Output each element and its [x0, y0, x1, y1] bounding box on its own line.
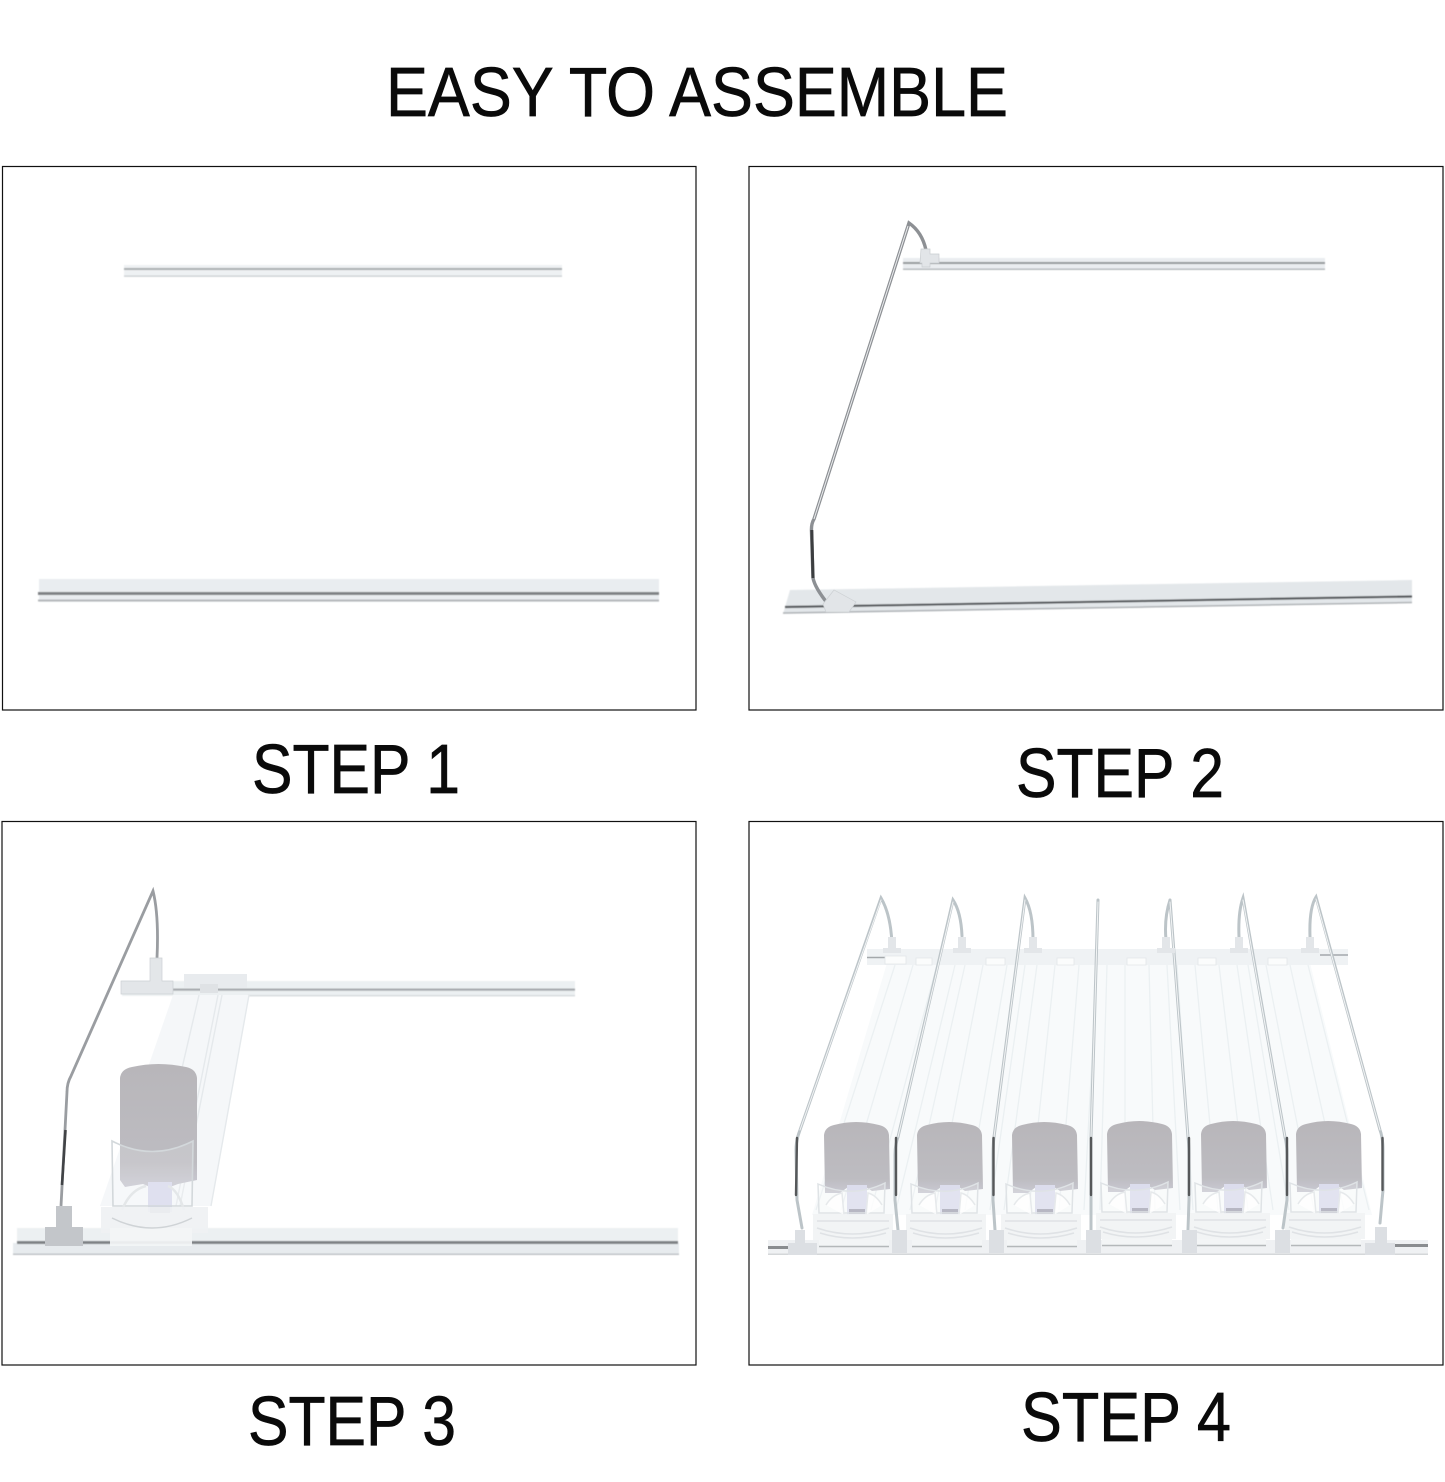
panel: step 3: [2, 822, 696, 1365]
rear clips: [883, 937, 1319, 953]
clear track: [100, 974, 249, 1206]
slider 1: [813, 1122, 893, 1247]
top rail: [124, 265, 562, 277]
top clip: [121, 958, 173, 994]
panel: step 1: [2, 166, 696, 710]
label: step 2: STEP 2: [1016, 734, 1224, 812]
rear rail: [867, 949, 1348, 965]
paddle slider: [101, 1064, 208, 1246]
sliders: [813, 1121, 1365, 1247]
label: step 3: STEP 3: [248, 1382, 456, 1460]
wire divider: [811, 223, 926, 604]
slider 4: [1096, 1121, 1176, 1246]
title: EASY TO ASSEMBLE: [386, 53, 1008, 131]
wire dividers: [796, 897, 1383, 1230]
bottom clip: [823, 590, 856, 612]
clear lanes: [812, 963, 1372, 1215]
panel: step 4: [749, 822, 1443, 1365]
top clip: [920, 249, 939, 267]
panel: step 2: [749, 166, 1443, 710]
slider 5: [1190, 1121, 1270, 1246]
front clips: [788, 1227, 1395, 1255]
front rail: [768, 1240, 1428, 1255]
wire divider: [61, 891, 158, 1206]
top rail: [122, 981, 575, 996]
slider 6: [1285, 1121, 1365, 1246]
slider 3: [1001, 1122, 1081, 1247]
label: step 1: STEP 1: [252, 730, 460, 808]
top rail: [903, 258, 1325, 270]
bottom clip: [45, 1206, 83, 1246]
bottom rail: [38, 579, 659, 602]
bottom rail: [13, 1228, 679, 1255]
bottom rail: [783, 580, 1412, 614]
label: step 4: STEP 4: [1021, 1378, 1231, 1456]
slider 2: [906, 1122, 986, 1247]
